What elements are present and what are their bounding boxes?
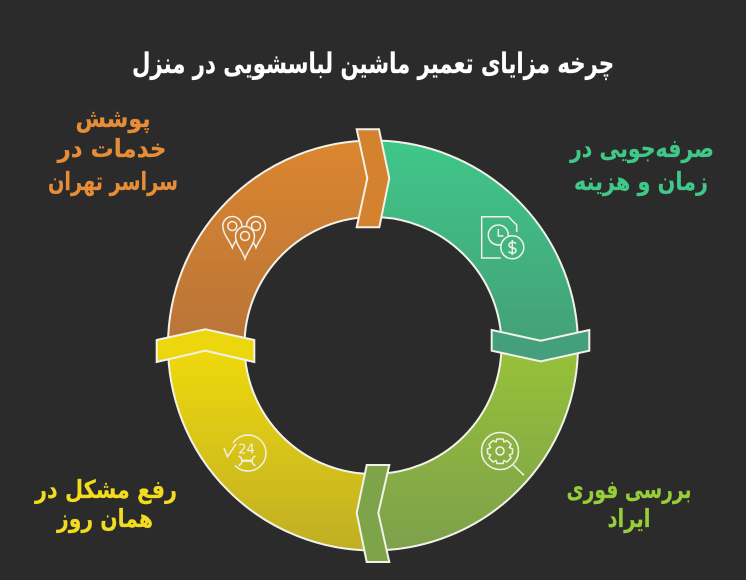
label: same day fix: رفع مشکل در	[33, 475, 177, 505]
segment: yellow	[168, 346, 373, 550]
label: coverage: پوشش	[76, 104, 150, 134]
arrow: top chevron	[357, 129, 389, 227]
segment: green	[373, 140, 578, 346]
label: instant diagnosis	[566, 475, 692, 534]
label: coverage: خدمات در	[56, 134, 166, 163]
icon: three map pins	[223, 216, 266, 259]
label: cost saving: صرفه‌جویی در	[568, 134, 714, 164]
label: cost saving	[568, 134, 714, 197]
label: coverage	[48, 104, 178, 197]
icon: document with clock and dollar	[482, 217, 524, 259]
label: same day fix	[33, 475, 177, 534]
icon: gear with magnifier	[482, 432, 524, 475]
label: instant diagnosis: ایراد	[608, 504, 650, 534]
label: coverage: سراسر تهران	[48, 167, 178, 197]
arrow: bottom chevron	[357, 465, 389, 562]
label: instant diagnosis: بررسی فوری	[566, 475, 692, 505]
arrow: left chevron	[157, 329, 254, 362]
segment: orange	[168, 140, 373, 346]
label: cost saving: زمان و هزینه	[574, 167, 708, 197]
label: same day fix: همان روز	[55, 504, 153, 534]
icon: 24 hour repair	[224, 435, 266, 471]
arrow: right chevron	[492, 330, 589, 361]
icon: 24 hour repair: 24	[238, 442, 255, 458]
segment: lime	[373, 346, 578, 550]
